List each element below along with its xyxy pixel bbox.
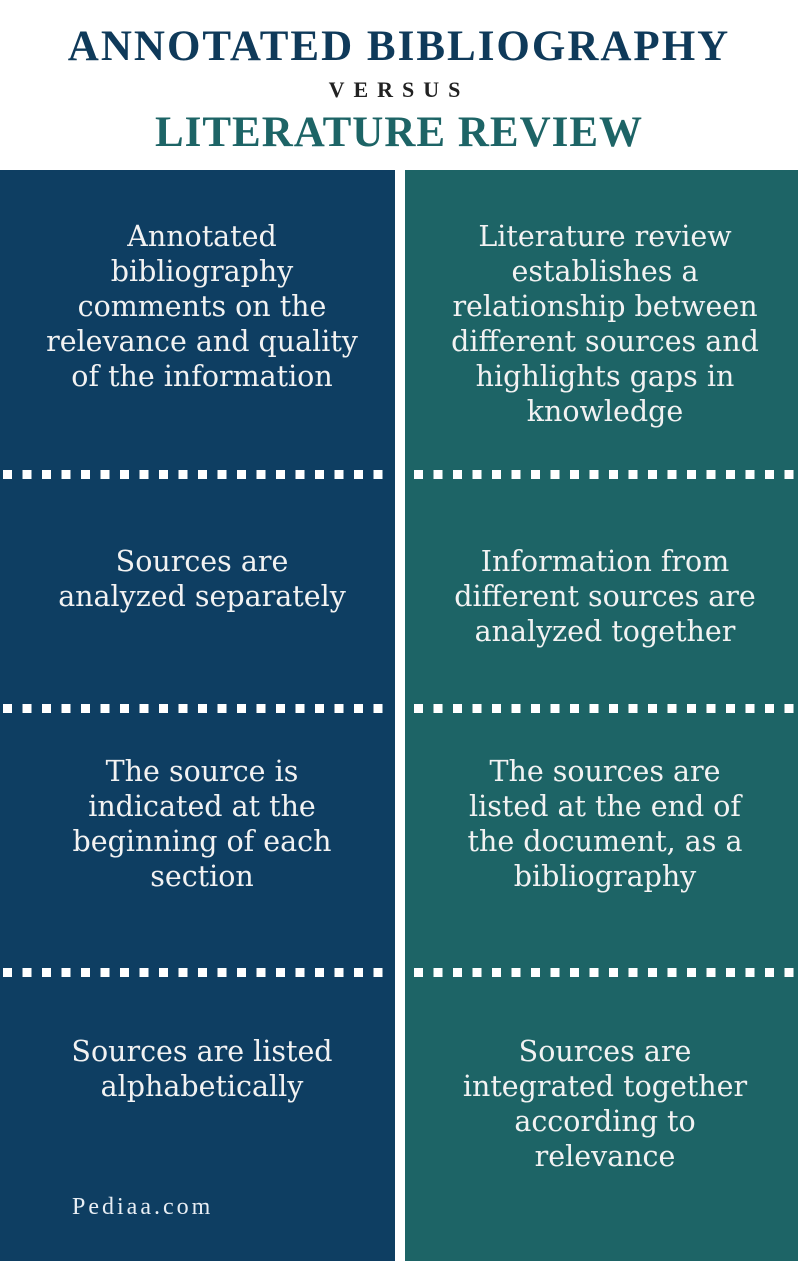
text: right row 3: the document, as a: [468, 825, 742, 858]
text: right row 2: different sources are: [454, 580, 756, 613]
text: left row 2: Sources are: [116, 545, 288, 578]
text: right row 4: integrated together: [463, 1070, 747, 1103]
separators: [3, 470, 391, 479]
panel: annotated bibliography column: [0, 170, 395, 1261]
text: left row 2: analyzed separately: [58, 580, 346, 613]
text: right row 4: relevance: [535, 1140, 675, 1173]
heading: literature review: LITERATURE REVIEW: [155, 109, 643, 156]
title: [68, 23, 730, 156]
text: left row 1: Annotated: [127, 220, 277, 253]
text: right row 4: according to: [514, 1105, 696, 1138]
text: left row 1: bibliography: [111, 255, 293, 288]
text: right row 1: Literature review: [478, 220, 732, 253]
text: left row 3: [73, 755, 331, 893]
text: right row 3: bibliography: [514, 860, 696, 893]
text: left row 3: section: [150, 860, 254, 893]
text: left row 1: [46, 220, 358, 393]
text: left row 4: alphabetically: [101, 1070, 303, 1103]
text: left row 3: beginning of each: [73, 825, 331, 858]
logo: Pediaa.com: Pediaa.com: [72, 1194, 213, 1220]
text: left row 3: indicated at the: [88, 790, 316, 823]
text: left row 4: [71, 1035, 333, 1103]
text: left row 4: Sources are listed: [71, 1035, 333, 1068]
text: left row 2: [58, 545, 346, 613]
text: right row 4: Sources are: [519, 1035, 691, 1068]
text: right row 4: [463, 1035, 748, 1173]
text: right row 1: highlights gaps in: [476, 360, 734, 393]
panel: literature review column: [405, 170, 798, 1261]
text: right row 3: [468, 755, 743, 893]
heading: versus: VERSUS: [329, 77, 469, 102]
text: left row 1: of the information: [71, 360, 333, 393]
text: right row 3: The sources are: [489, 755, 721, 788]
text: right row 1: knowledge: [527, 395, 683, 428]
text: right row 1: [451, 220, 759, 428]
text: left row 1: relevance and quality: [46, 325, 358, 358]
text: right row 1: establishes a: [512, 255, 698, 288]
text: right row 1: relationship between: [452, 290, 758, 323]
text: right row 2: analyzed together: [475, 615, 735, 648]
text: left row 3: The source is: [106, 755, 298, 788]
text: right row 2: Information from: [481, 545, 729, 578]
text: right row 3: listed at the end of: [469, 790, 741, 823]
heading: annotated bibliography: ANNOTATED BIBLIOGRAPHY: [68, 23, 730, 70]
text: right row 1: different sources and: [451, 325, 759, 358]
text: right row 2: [454, 545, 756, 648]
text: left row 1: comments on the: [78, 290, 326, 323]
